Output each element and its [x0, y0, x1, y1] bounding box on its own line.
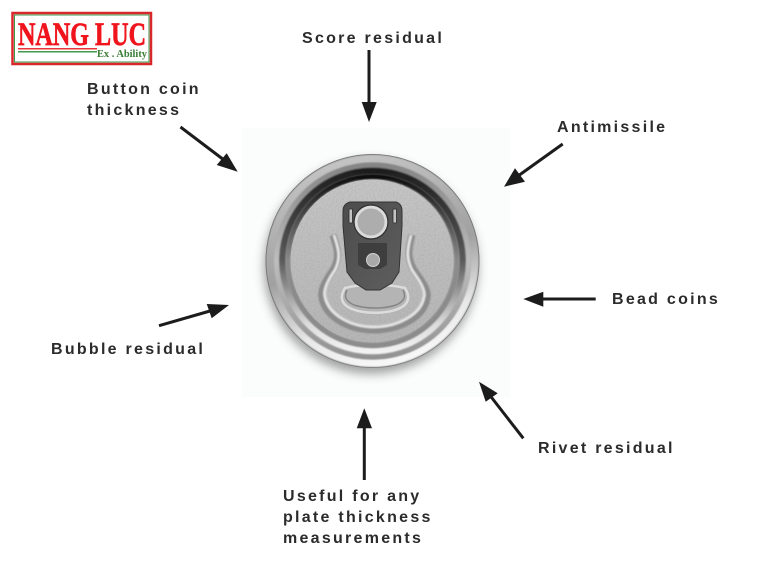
arrow: Bubble residual	[159, 304, 229, 326]
label: Bead coins: Bead coins	[612, 291, 720, 308]
logo: Ex . Ability	[97, 49, 147, 60]
arrow: Useful for any plate	[357, 408, 372, 480]
score recess	[322, 235, 427, 330]
rivet	[366, 254, 380, 266]
arrow: Bead coins	[523, 292, 596, 307]
label: Useful for any plate thickness measurements: plate thickness	[283, 509, 433, 526]
label: Score residual: Score residual	[302, 30, 444, 47]
finger well	[342, 285, 408, 313]
label: Bubble residual: Bubble residual	[51, 341, 205, 358]
label: Button coin thickness: thickness	[87, 102, 181, 119]
outer rim	[266, 154, 479, 368]
logo: NANG LUC	[18, 17, 146, 53]
label: Rivet residual: Rivet residual	[538, 440, 675, 457]
tab ring	[356, 207, 386, 237]
arrow: Button coin thickness	[180, 127, 238, 172]
center panel	[290, 180, 454, 342]
pull tab	[343, 202, 402, 290]
tab slots	[349, 209, 352, 223]
logo	[12, 13, 151, 64]
photo background	[242, 128, 510, 397]
arrow: Antimissile	[504, 144, 563, 187]
label: Antimissile: Antimissile	[557, 119, 667, 136]
can lid photo	[264, 154, 479, 374]
label: Useful for any plate thickness measurements: Useful for any	[283, 488, 421, 505]
tab rivet well	[358, 243, 387, 269]
arrow: Score residual	[362, 50, 377, 122]
arrow: Rivet residual	[479, 382, 523, 438]
label: Button coin thickness: Button coin	[87, 81, 201, 98]
lid drop shadow	[264, 160, 478, 374]
recessed groove	[282, 171, 462, 351]
label: Useful for any plate thickness measurements: measurements	[283, 530, 423, 547]
